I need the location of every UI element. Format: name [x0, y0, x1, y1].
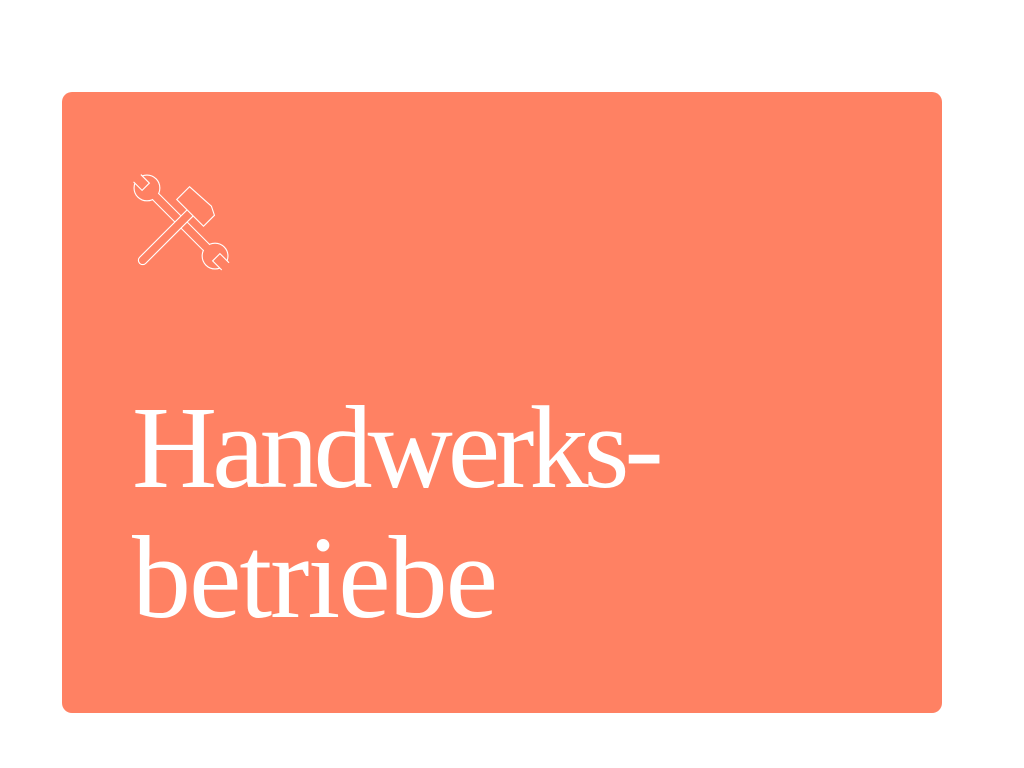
title: Handwerks-	[132, 382, 659, 513]
icon: hammer and wrench	[133, 174, 230, 270]
panel: card	[62, 92, 942, 713]
title: betriebe	[132, 512, 496, 643]
title	[132, 382, 660, 643]
